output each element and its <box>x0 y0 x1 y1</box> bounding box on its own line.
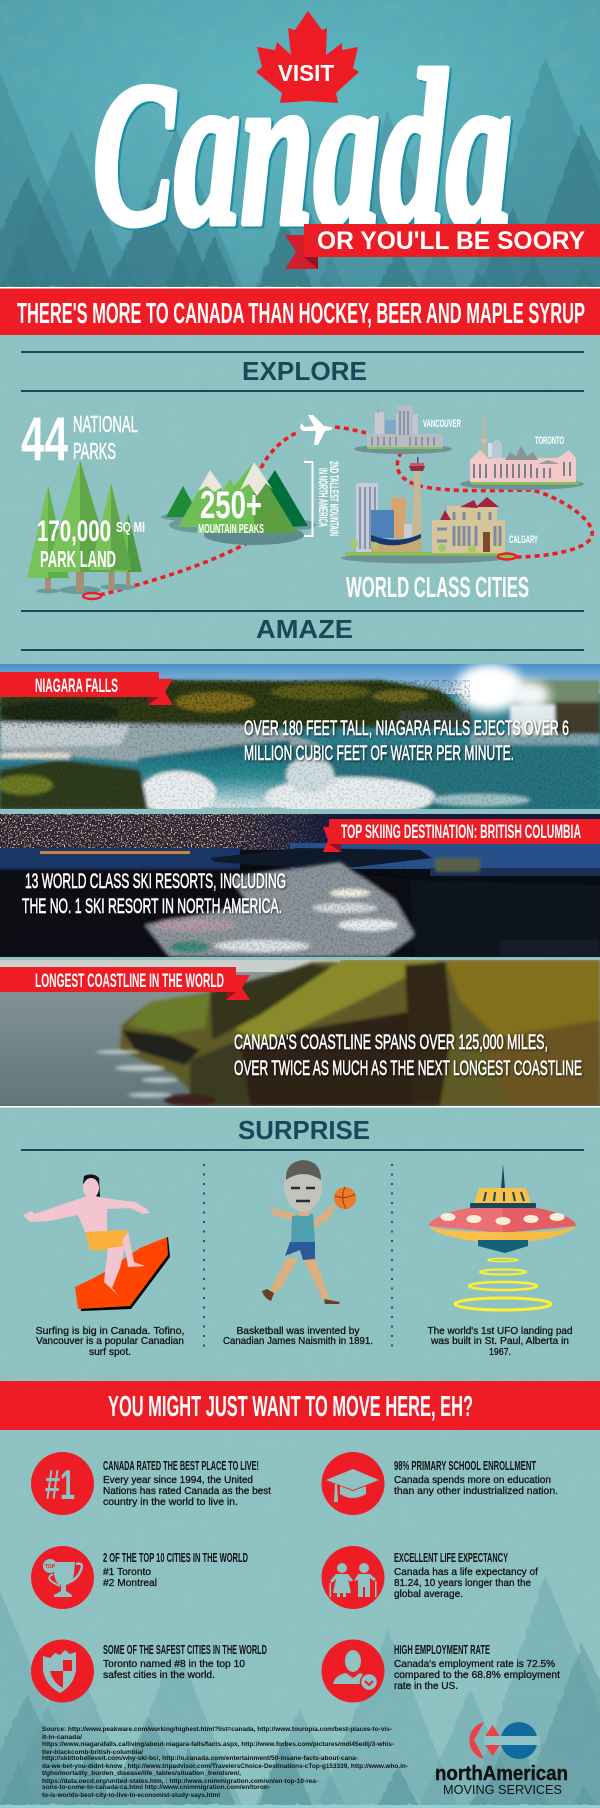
logo: northAmerican Moving Services: MOVING SERVICES <box>443 1783 562 1797</box>
text: life expectancy: Canada has a life expectancy of <box>394 1566 538 1578</box>
text block: sources: https://www.niagarafalls.ca/living/about-niagara-falls/facts.aspx, http://www.forbes.com/pictures/mdi45edlj/3-whis- <box>42 1741 394 1748</box>
text block: sources: to-is-worlds-best-city-to-live-in-economist-study-says.html <box>42 1792 220 1799</box>
label: park land: PARK LAND <box>40 546 116 572</box>
text: employment: compared to the 68.8% employment <box>394 1669 560 1681</box>
text: best place <box>103 1458 271 1508</box>
icon: airplane <box>300 415 332 445</box>
divider: white line <box>0 287 600 288</box>
icon: graduation cap <box>322 1452 384 1515</box>
text block: sources: http://skiittobelieveit.com/why-ski-bc/, http://o.canada.com/entertainment/50-insane-facts-about-cana- <box>42 1755 358 1762</box>
ribbon: longest coastline: LONGEST COASTLINE IN THE WORLD <box>35 971 224 992</box>
heading: surprise: SURPRISE <box>238 1115 370 1145</box>
caption: surfing: Surfing is big in Canada. Tofino, <box>36 1325 184 1337</box>
item: life expectancy <box>322 1546 538 1609</box>
illustration: Toronto <box>460 407 584 490</box>
text: life expectancy: EXCELLENT LIFE EXPECTANCY <box>394 1550 508 1565</box>
caption: basketball <box>223 1325 373 1347</box>
logo: northAmerican Moving Services <box>435 1722 568 1797</box>
text: life expectancy <box>394 1550 538 1600</box>
text: employment <box>394 1642 560 1692</box>
label: Toronto: TORONTO <box>535 435 564 447</box>
bottom strip <box>0 1805 600 1808</box>
ribbon: longest coastline <box>0 967 250 1000</box>
ribbon: or you'll be soory: OR YOU'LL BE SOORY <box>317 228 586 255</box>
bracket <box>304 462 312 536</box>
label: national parks: NATIONAL <box>73 411 138 437</box>
icon: trophy <box>31 1546 94 1609</box>
banner: more to Canada <box>0 288 600 335</box>
panel: national parks <box>21 405 145 599</box>
icon: surfer <box>23 1174 170 1311</box>
caption: UFO: was built in St. Paul, Alberta in <box>430 1335 569 1347</box>
ribbon: Niagara Falls: NIAGARA FALLS <box>35 676 118 697</box>
text: safest cities: safest cities in the world. <box>103 1669 215 1681</box>
panel: skiing <box>0 814 600 957</box>
note: 2nd tallest mountain: IN NORTH AMERICA <box>316 468 330 527</box>
label: national parks <box>73 411 138 464</box>
icon: #1 <box>31 1452 94 1515</box>
stat: 250+: 250+ <box>200 484 262 527</box>
text: best place: Nations has rated Canada as the best <box>103 1485 271 1497</box>
ribbon: Niagara Falls <box>0 672 173 705</box>
panel: UFO <box>428 1164 576 1358</box>
route: dashed flight path <box>100 427 592 595</box>
icon: #1: #1 <box>45 1461 75 1508</box>
text: safest cities: Toronto named #8 in the top 10 <box>103 1658 245 1670</box>
text: safest cities: SOME OF THE SAFEST CITIES IN THE WORLD <box>103 1642 267 1657</box>
text: employment: rate in the US. <box>394 1680 458 1692</box>
heading: amaze: AMAZE <box>256 614 353 644</box>
text: life expectancy: global average. <box>394 1588 463 1600</box>
item: employment <box>322 1640 560 1702</box>
icon: maple leaf <box>256 11 359 103</box>
text: top cities: #2 Montreal <box>103 1577 157 1589</box>
caption: surfing: Vancouver is a popular Canadian <box>36 1335 184 1347</box>
caption: basketball: Canadian James Naismith in 1891. <box>223 1335 373 1347</box>
text: school: Canada spends more on education <box>394 1474 551 1486</box>
panel: mountains <box>161 461 341 545</box>
text: top cities: 2 OF THE TOP 10 CITIES IN THE WORLD <box>103 1550 248 1565</box>
text block: sources: sons-to-come-to-canada-ca.html http://www.cnimmigration.com/en/toron- <box>42 1784 270 1791</box>
text: safest cities <box>103 1642 267 1681</box>
text block: sources: https://data.oecd.org/united-states.htm, : http://www.cnimmigration.com/en/en-top-10-rea- <box>42 1778 318 1785</box>
label: national parks: PARKS <box>73 438 116 464</box>
item: school enrollment <box>322 1452 558 1515</box>
caption: surfing: surf spot. <box>89 1346 131 1358</box>
icon: shield <box>31 1640 94 1702</box>
banner: move here <box>0 1381 600 1430</box>
text block: sources <box>42 1726 408 1799</box>
text: school <box>394 1458 558 1497</box>
panel: cities <box>341 405 584 604</box>
text: employment: Canada's employment rate is 72.5% <box>394 1658 555 1670</box>
icon: elderly couple <box>322 1546 384 1609</box>
caption: UFO: The world's 1st UFO landing pad <box>428 1325 573 1337</box>
heading: explore: EXPLORE <box>242 356 367 386</box>
divider: white line below photos <box>0 1106 600 1108</box>
text block: sources: t/gho/mortality_burden_disease/life_tables/situation_trends/en/, <box>42 1770 241 1777</box>
note: 2nd tallest mountain: 2ND TALLEST MOUNTAIN <box>327 461 341 536</box>
icon: trophy: TOP <box>45 1564 56 1570</box>
icon: person with check <box>322 1640 384 1702</box>
photo: Niagara Falls <box>0 664 600 817</box>
panel: surfing <box>23 1174 184 1358</box>
text: skiing fact: 13 WORLD CLASS SKI RESORTS, INCLUDING <box>25 869 286 893</box>
text block: sources: tler-blackcomb-british-columbia/ <box>42 1749 143 1756</box>
text: life expectancy: 81.24, 10 years longer than the <box>394 1577 531 1589</box>
label: Calgary: CALGARY <box>509 534 538 546</box>
photo: British Columbia at night <box>0 814 600 957</box>
photo: coastline <box>0 960 600 1106</box>
note: 2nd tallest mountain <box>316 461 341 536</box>
panel: basketball <box>223 1160 373 1347</box>
marker: route end <box>498 554 516 560</box>
logo: northAmerican Moving Services: northAmerican <box>435 1763 568 1785</box>
caption: UFO: 1967. <box>489 1346 511 1358</box>
text: top cities <box>103 1550 248 1589</box>
label: Vancouver: VANCOUVER <box>423 418 461 430</box>
panel: Niagara Falls <box>0 664 600 817</box>
text: best place: CANADA RATED THE BEST PLACE TO LIVE! <box>103 1458 259 1473</box>
panel: hero header <box>0 0 600 287</box>
label: mountain peaks: MOUNTAIN PEAKS <box>198 521 264 536</box>
visit label: VISIT <box>278 60 334 86</box>
column dividers <box>204 1164 392 1348</box>
stat: 170,000: 170,000 <box>37 515 111 548</box>
text block: sources: it-in-canada/ <box>42 1734 82 1741</box>
caption: UFO <box>428 1325 573 1358</box>
text: school: than any other industrialized nation. <box>394 1485 558 1497</box>
text: skiing fact: THE NO. 1 SKI RESORT IN NORTH AMERICA. <box>22 894 282 918</box>
illustration: Vancouver <box>354 405 452 454</box>
item: top cities <box>31 1546 248 1609</box>
text: Niagara fact <box>244 716 569 765</box>
stat: 44: 44 <box>21 405 68 474</box>
marker: route start <box>83 593 101 599</box>
text: skiing fact <box>22 869 286 918</box>
background: lower forest <box>0 1575 600 1805</box>
caption: basketball: Basketball was invented by <box>236 1325 360 1337</box>
ribbon: top skiing destination <box>323 819 600 852</box>
icon: pine trees <box>27 460 142 594</box>
illustration: Calgary <box>341 457 505 564</box>
label: sq mi: SQ MI <box>116 519 145 536</box>
text: employment: HIGH EMPLOYMENT RATE <box>394 1642 490 1657</box>
icon: mountain range <box>161 462 316 545</box>
text: best place: country in the world to live in. <box>103 1496 238 1508</box>
icon: UFO <box>429 1164 576 1310</box>
text: coastline fact <box>234 1030 582 1080</box>
caption: surfing <box>36 1325 184 1358</box>
item: best place to live <box>31 1452 271 1515</box>
text: top cities: #1 Toronto <box>103 1566 151 1578</box>
ribbon: or you'll be soory <box>285 224 600 269</box>
text block: sources: Source: http://www.peakware.com/working/highest.html?list=canada, http://www.touropia.com/best-places-to-vis- <box>42 1726 392 1733</box>
icon: James Naismith <box>262 1160 356 1304</box>
text: best place: Every year since 1994, the United <box>103 1474 253 1486</box>
item: safest cities <box>31 1640 267 1702</box>
text block: sources: da-we-bet-you-didnt-know , http://www.tripadvisor.com/TravelersChoice-Destinations-cTop-g153339, http://www.who.in- <box>42 1763 408 1770</box>
panel: coastline <box>0 960 600 1106</box>
